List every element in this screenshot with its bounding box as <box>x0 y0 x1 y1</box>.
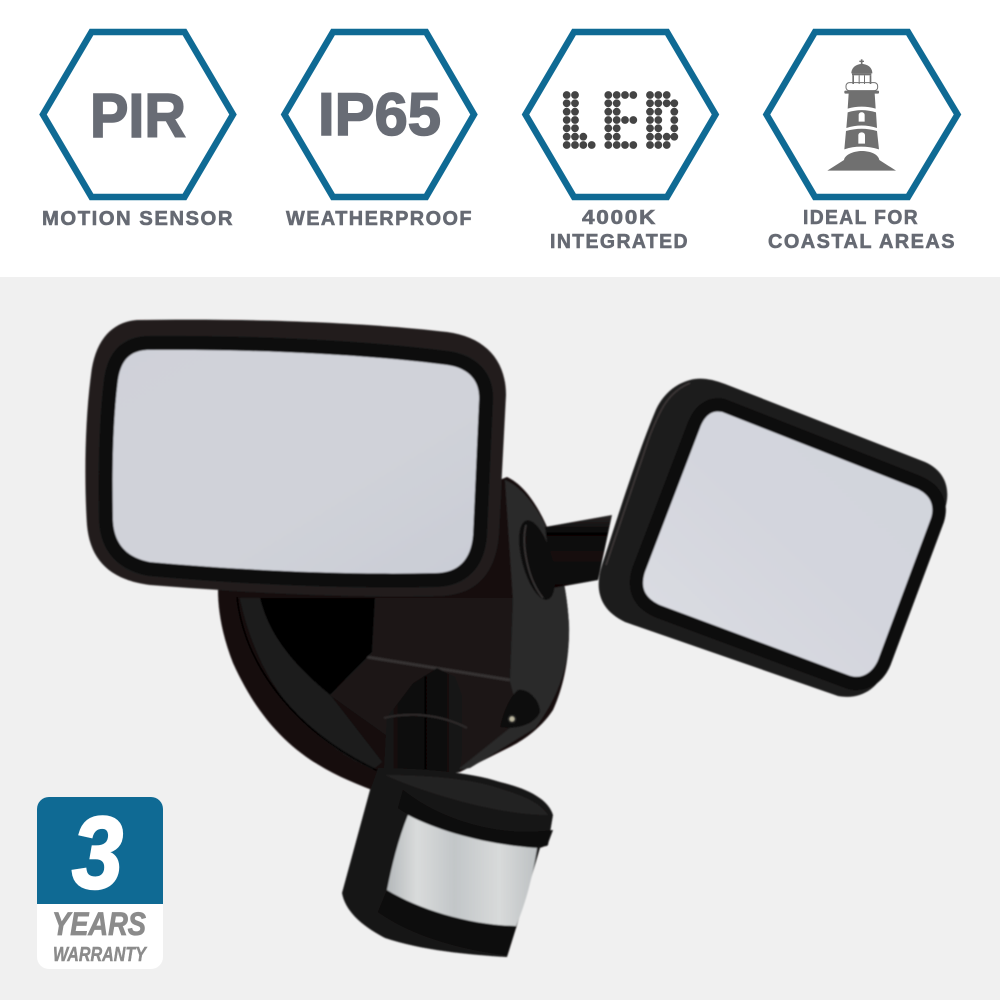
warranty badge <box>37 796 163 969</box>
product: twin-head flood light with sensor <box>85 320 947 957</box>
right lamp head <box>599 379 947 697</box>
mounting plate <box>218 477 569 790</box>
badge: PIR motion sensor <box>42 32 234 230</box>
dot letter L <box>563 91 596 149</box>
icon: lighthouse <box>827 59 896 171</box>
number 3: 3 <box>72 796 123 910</box>
badge white base <box>37 797 163 969</box>
text: warranty: WARRANTY <box>53 944 147 966</box>
text: years: YEARS <box>52 906 147 942</box>
hexagon: IP65 <box>284 32 474 197</box>
heading: PIR: PIR <box>90 82 186 151</box>
product background panel <box>0 277 1000 1000</box>
dot letter D <box>646 91 678 149</box>
badge: LED 4000K integrated <box>526 32 716 253</box>
label: ideal for coastal areas: IDEAL FOR <box>803 206 919 229</box>
label: 4000K integrated: 4000K <box>582 206 657 229</box>
adjuster screw <box>500 690 540 728</box>
hexagon: LED <box>526 32 716 197</box>
left lamp head <box>85 320 506 596</box>
label: 4000K integrated <box>550 206 689 253</box>
label: ideal for coastal areas: COASTAL AREAS <box>768 230 956 253</box>
icon: dot-matrix LED letters <box>563 91 678 149</box>
header band <box>0 0 1000 277</box>
hexagon: lighthouse <box>766 32 958 197</box>
badge: IP65 weatherproof <box>284 32 474 230</box>
hexagon: PIR <box>43 32 233 197</box>
dot letter E <box>604 91 637 149</box>
label: ideal for coastal areas <box>768 206 956 253</box>
PIR motion sensor <box>342 768 553 957</box>
swivel arm <box>512 515 612 603</box>
badge blue top <box>37 797 163 904</box>
sensor neck <box>384 668 467 772</box>
heading: IP65: IP65 <box>318 81 441 148</box>
label: weatherproof: WEATHERPROOF <box>286 207 473 230</box>
badge: ideal for coastal areas <box>766 32 958 253</box>
label: motion sensor: MOTION SENSOR <box>42 207 234 230</box>
label: 4000K integrated: INTEGRATED <box>550 230 689 253</box>
